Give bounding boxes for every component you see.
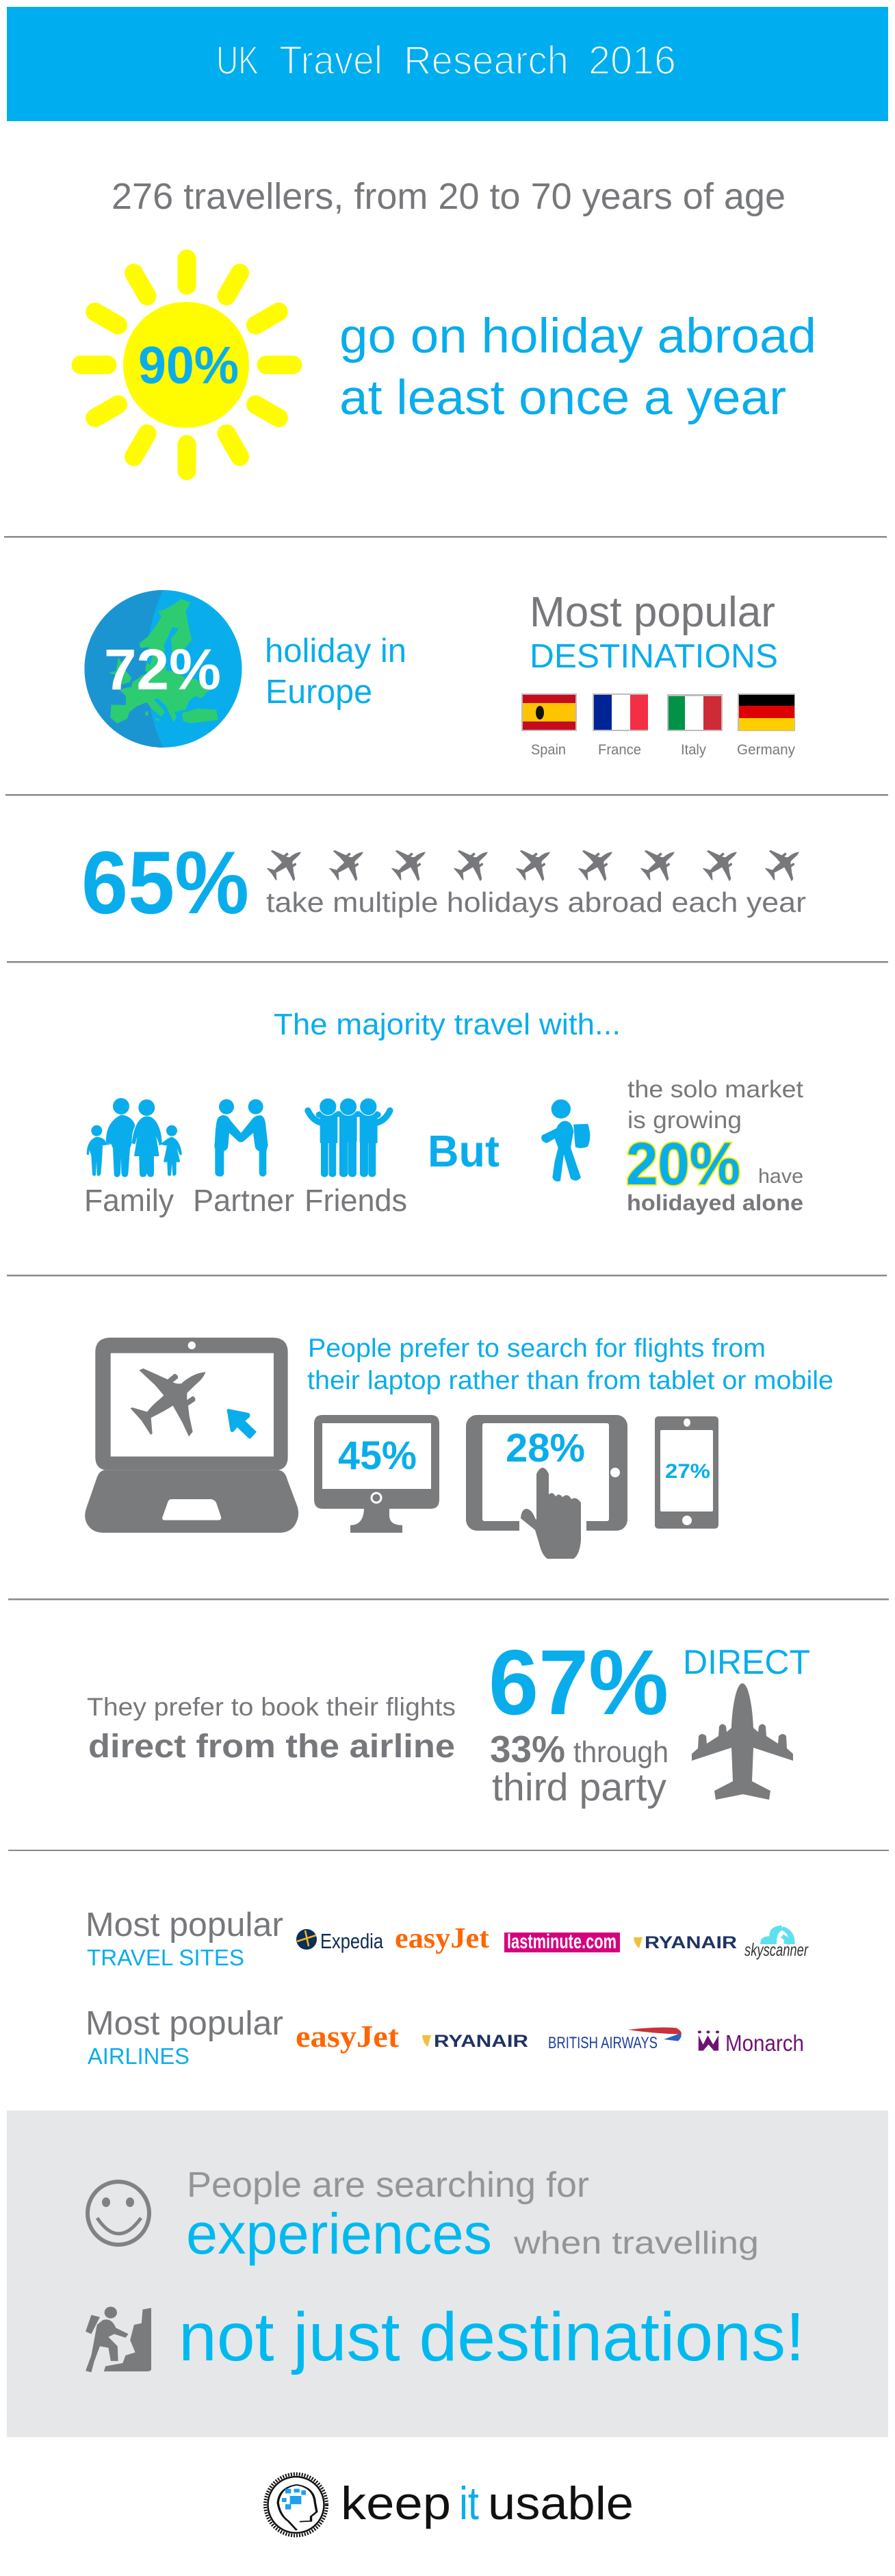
panel: experiences conclusion [7, 2110, 888, 2437]
third party text [490, 1728, 669, 1809]
solo market text: have [758, 1165, 803, 1188]
experiences statement: experiences [186, 2202, 492, 2266]
header banner [7, 7, 888, 121]
solo market text: is growing [627, 1107, 742, 1134]
experiences statement [186, 2165, 759, 2266]
icon: large plane [692, 1683, 793, 1800]
experiences statement: People are searching for [187, 2165, 589, 2205]
logo: Ryanair: RYANAIR [645, 1933, 737, 1952]
title: 2016 [588, 38, 676, 83]
67 percent figure: 67% [489, 1631, 669, 1734]
icon: solo backpacker [541, 1099, 590, 1182]
wordmark: usable [488, 2477, 634, 2529]
icon: family [87, 1098, 182, 1177]
labels: family partner friends [84, 1183, 407, 1218]
third party text: 33% [490, 1728, 565, 1770]
third party text: third party [492, 1765, 666, 1809]
wordmark: keep [341, 2477, 451, 2529]
title: Travel [279, 38, 382, 83]
country labels: Spain [531, 742, 566, 758]
65 percent figure: 65% [81, 832, 249, 932]
holiday in Europe text [265, 633, 406, 711]
labels: family partner friends: Partner [193, 1183, 294, 1218]
flag: France [593, 693, 648, 731]
third party text: through [573, 1735, 669, 1769]
icon: phone 27 percent [655, 1416, 718, 1529]
device statement: their laptop rather than from tablet or mobile [307, 1366, 833, 1395]
device statement [307, 1334, 833, 1395]
multiple holidays statement: take multiple holidays abroad each year [266, 887, 806, 918]
icon: climber [86, 2307, 151, 2372]
flag: Germany [738, 693, 795, 731]
logo: Monarch [698, 2030, 804, 2056]
title [216, 38, 676, 83]
panel: Europe and destinations [84, 589, 795, 758]
logo: Monarch: Monarch [725, 2030, 804, 2056]
booking statement [87, 1693, 456, 1765]
90 percent figure: 90% [138, 336, 239, 395]
labels: family partner friends: Family [84, 1183, 174, 1218]
logo: Skyscanner [744, 1926, 809, 1960]
heading: most popular destinations: Most popular [530, 589, 775, 636]
heading: most popular travel sites [86, 1907, 283, 1970]
icon: friends [308, 1098, 390, 1177]
logo: Ryanair airline: RYANAIR [434, 2032, 528, 2051]
icon: tablet with hand 28 percent [466, 1415, 627, 1559]
flag: Spain [521, 693, 577, 731]
experiences statement: when travelling [513, 2225, 759, 2260]
heading: most popular airlines [86, 2005, 283, 2069]
logo: keep it usable [265, 2474, 634, 2536]
heading: most popular travel sites: Most popular [86, 1907, 283, 1943]
logo: easyJet airline: easyJet [296, 2019, 400, 2054]
solo market text: 20% [626, 1131, 740, 1197]
heading: most popular destinations: DESTINATIONS [530, 638, 778, 675]
title: UK [216, 38, 259, 83]
panel: popular sites and airlines [86, 1907, 809, 2069]
solo market text: the solo market [627, 1076, 803, 1103]
icon: sun [81, 259, 293, 471]
icon: gear head [265, 2474, 327, 2536]
panel: who they travel with [84, 1008, 803, 1218]
wordmark: it [459, 2477, 479, 2529]
panel: device preference [85, 1334, 833, 1559]
icon: smiley [88, 2182, 149, 2245]
heading: most popular airlines: Most popular [86, 2005, 283, 2042]
title: Research [404, 38, 569, 83]
country labels [531, 742, 795, 758]
heading: most popular destinations [530, 589, 778, 675]
logo: Skyscanner: skyscanner [744, 1939, 809, 1960]
icon: row of nine planes [267, 850, 799, 881]
heading: the majority travel with: The majority travel with... [274, 1008, 621, 1041]
country labels: Italy [681, 742, 706, 758]
heading: most popular airlines: AIRLINES [88, 2043, 190, 2069]
holiday abroad statement [339, 309, 816, 425]
logo: lastminute.com: lastminute.com [507, 1930, 617, 1953]
holiday abroad statement: go on holiday abroad [339, 309, 816, 364]
72 percent figure: 72% [104, 637, 221, 702]
labels: family partner friends: Friends [304, 1183, 407, 1218]
not just destinations headline: not just destinations! [179, 2299, 805, 2375]
holiday in Europe text: holiday in [265, 633, 406, 669]
logo: Expedia [296, 1929, 384, 1953]
solo market text: holidayed alone [627, 1190, 803, 1215]
icon: laptop with plane and cursor [85, 1338, 298, 1533]
icon: desktop monitor 45 percent: 45% [338, 1433, 417, 1478]
holiday abroad statement: at least once a year [339, 371, 786, 425]
logo: Expedia: Expedia [320, 1929, 384, 1953]
wordmark [341, 2477, 634, 2529]
icon: phone 27 percent: 27% [665, 1460, 710, 1483]
holiday in Europe text: Europe [265, 674, 372, 711]
But label: But [428, 1126, 500, 1176]
icon: desktop monitor 45 percent [314, 1415, 439, 1533]
solo market text [626, 1076, 803, 1215]
country labels: Germany [737, 742, 795, 758]
heading: most popular travel sites: TRAVEL SITES [87, 1945, 244, 1970]
device statement: People prefer to search for flights from [308, 1334, 766, 1363]
booking statement: They prefer to book their flights [87, 1693, 456, 1721]
direct label: DIRECT [683, 1643, 810, 1681]
panel: direct booking [87, 1631, 810, 1809]
icon: tablet with hand 28 percent: 28% [506, 1426, 585, 1470]
flag: Italy [667, 694, 723, 731]
country labels: France [598, 742, 641, 758]
icon: globe with Europe map [84, 590, 242, 748]
logo: easyJet: easyJet [395, 1923, 489, 1954]
icon: partner [214, 1099, 268, 1177]
logo: British Airways: BRITISH AIRWAYS [548, 2034, 658, 2052]
panel: multiple holidays [81, 832, 806, 932]
panel: 90 percent holiday abroad [81, 259, 816, 471]
survey sample text: 276 travellers, from 20 to 70 years of age [112, 176, 786, 217]
booking statement: direct from the airline [88, 1729, 455, 1765]
